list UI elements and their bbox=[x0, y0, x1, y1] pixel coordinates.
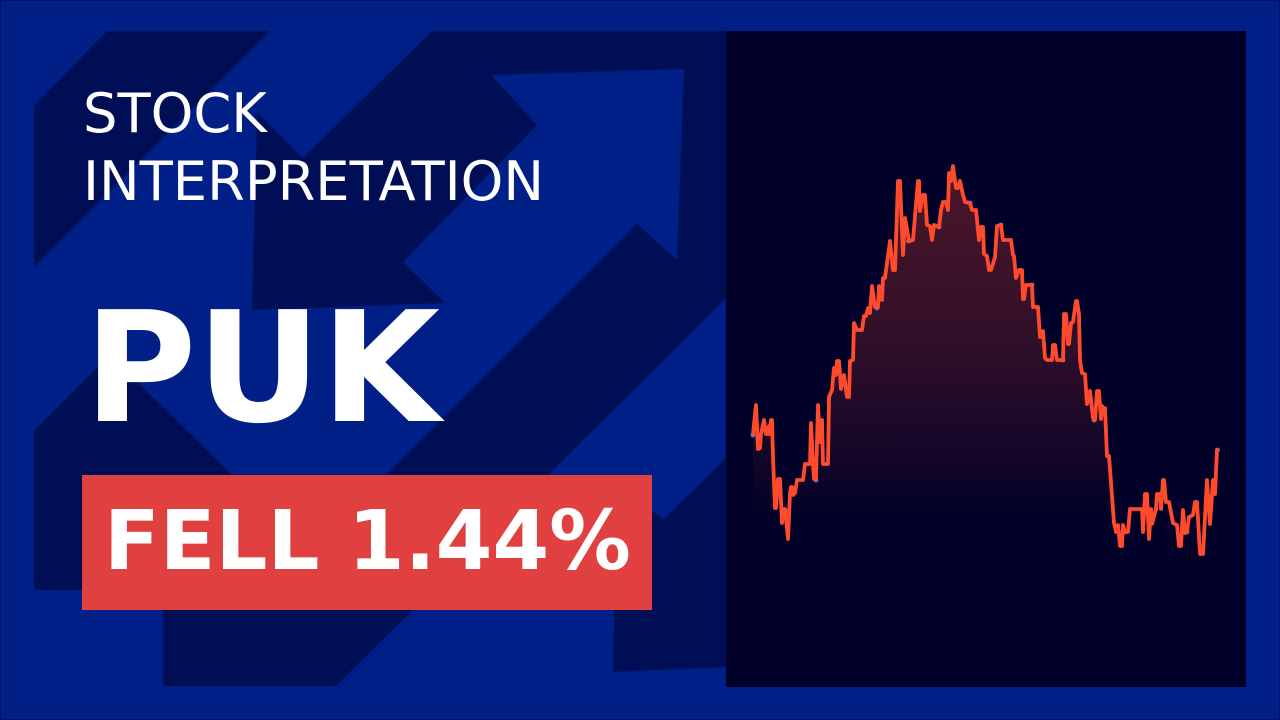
ticker: PUK: PUK bbox=[84, 280, 440, 458]
heading: stock interpretation bbox=[83, 82, 544, 213]
data point markers bbox=[751, 201, 1220, 534]
price line bbox=[753, 166, 1217, 554]
area under line bbox=[753, 166, 1217, 560]
heading: stock interpretation: INTERPRETATION bbox=[83, 150, 544, 213]
badge text: FELL 1.44% bbox=[104, 494, 631, 589]
heading: stock interpretation: STOCK bbox=[83, 82, 267, 145]
badge: fell 1.44% bbox=[82, 475, 652, 610]
